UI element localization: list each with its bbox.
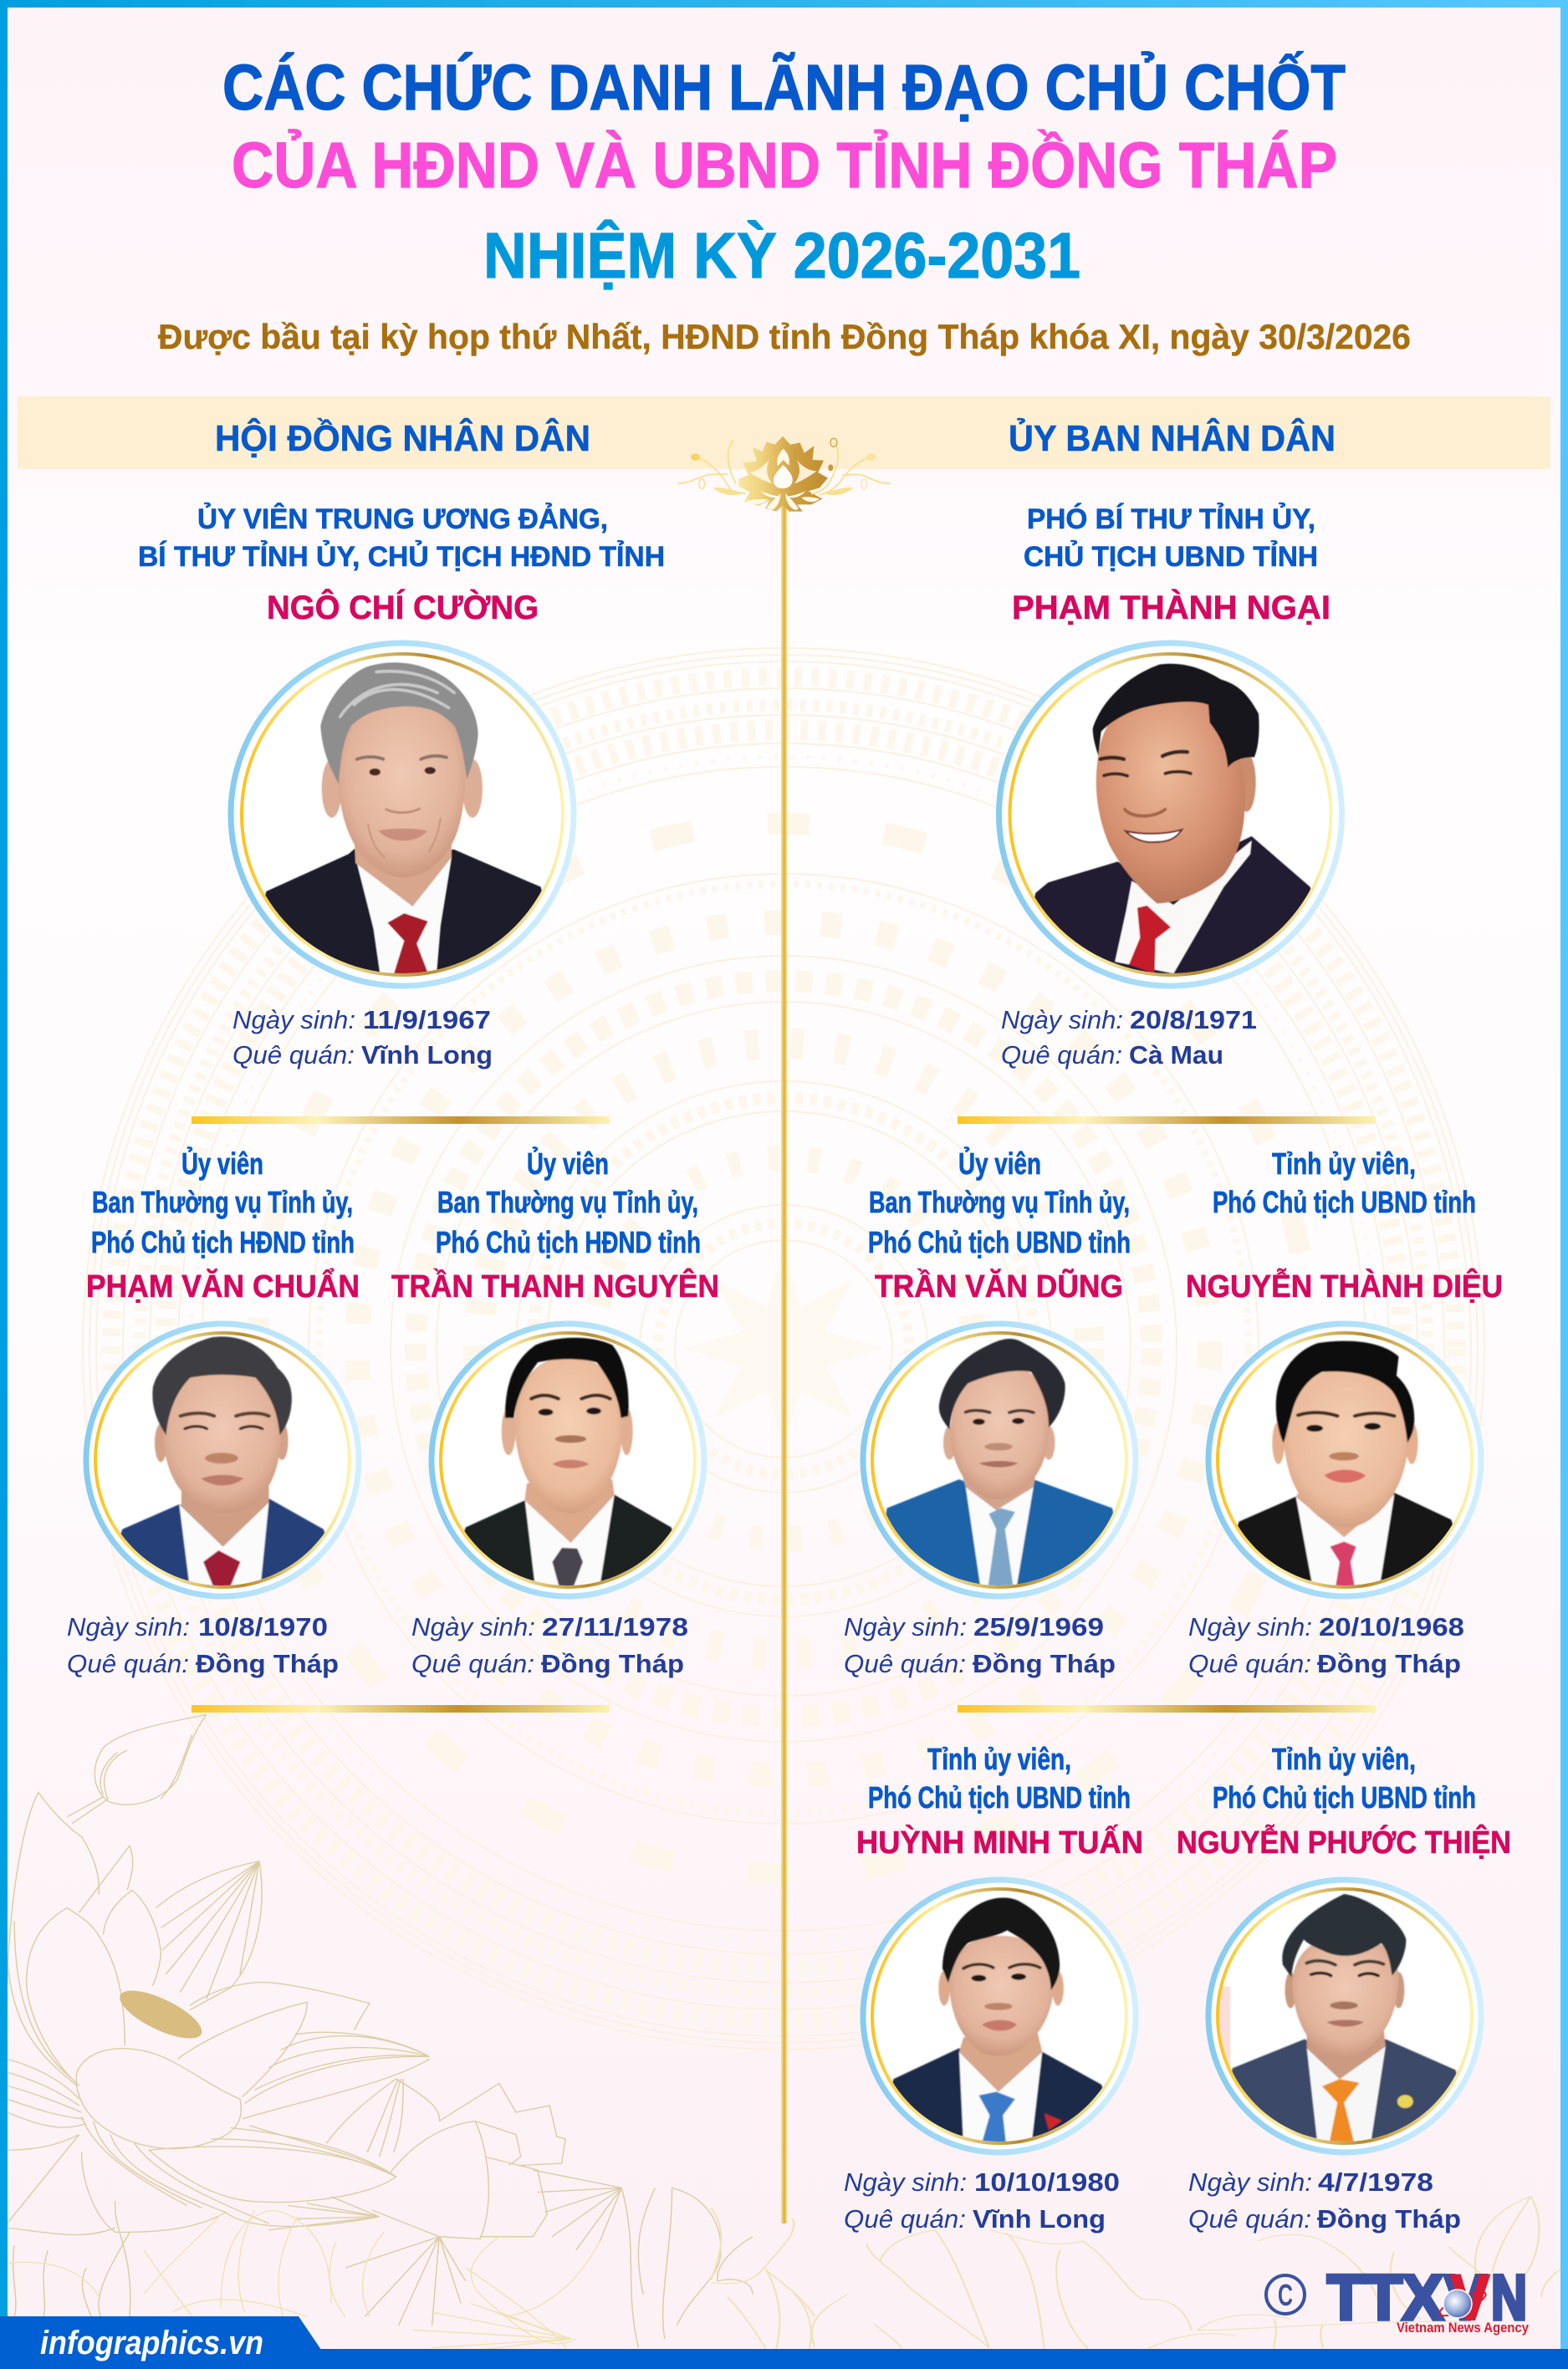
bio: Đồng Tháp	[1317, 1649, 1461, 1678]
role text	[1024, 503, 1318, 573]
name: TRẦN VĂN DŨNG	[875, 1268, 1123, 1304]
panel: Ngô Chí Cường	[138, 503, 665, 1070]
divider bar: right row 3	[958, 1705, 1376, 1713]
bio: Đồng Tháp	[196, 1649, 339, 1678]
role text: Phó Chủ tịch HĐND tỉnh	[91, 1225, 355, 1259]
footer site label: infographics.vn	[40, 2325, 263, 2361]
section header band	[18, 396, 1550, 469]
title line 2: CỦA HĐND VÀ UBND TỈNH ĐỒNG THÁP	[232, 129, 1337, 202]
background: lotus line art bottom left	[8, 1714, 753, 2350]
bio	[844, 2167, 1120, 2234]
role text	[91, 1146, 355, 1259]
role text: ỦY VIÊN TRUNG ƯƠNG ĐẢNG,	[197, 503, 608, 535]
bio: Đồng Tháp	[973, 1649, 1116, 1678]
role text: CHỦ TỊCH UBND TỈNH	[1024, 541, 1318, 573]
name: HUỲNH MINH TUẤN	[856, 1824, 1143, 1861]
role text: Phó Chủ tịch UBND tỉnh	[1213, 1185, 1476, 1219]
name: PHẠM THÀNH NGẠI	[1012, 589, 1331, 626]
title line 3: NHIỆM KỲ 2026-2031	[483, 219, 1080, 292]
bio: Quê quán:	[1001, 1040, 1122, 1070]
portrait photo	[86, 1324, 359, 1602]
bio: Cà Mau	[1129, 1040, 1223, 1070]
bio: Quê quán:	[844, 2204, 966, 2234]
title line 1: CÁC CHỨC DANH LÃNH ĐẠO CHỦ CHỐT	[222, 51, 1346, 124]
role text: Ủy viên	[181, 1146, 263, 1181]
bio: Ngày sinh:	[232, 1005, 355, 1034]
frame: top bar	[0, 0, 1568, 8]
name: TRẦN THANH NGUYÊN	[391, 1268, 719, 1304]
wordmark: TTX	[1327, 2263, 1443, 2333]
bio: Ngày sinh:	[1188, 2167, 1312, 2197]
title block	[158, 51, 1411, 356]
role text: Phó Chủ tịch HĐND tỉnh	[436, 1225, 701, 1259]
wordmark: Vietnam News Agency	[1397, 2320, 1529, 2336]
portrait photo	[231, 643, 574, 1015]
panel: Trần Văn Dũng	[844, 1146, 1136, 1678]
heading: right column: ỦY BAN NHÂN DÂN	[1009, 416, 1336, 459]
role text: Ban Thường vụ Tỉnh ủy,	[92, 1185, 353, 1219]
bio: Ngày sinh:	[844, 2167, 967, 2197]
role text	[1213, 1146, 1476, 1219]
wordmark: V	[1444, 2263, 1486, 2333]
bio: Đồng Tháp	[541, 1649, 684, 1678]
bio: Ngày sinh:	[1001, 1005, 1123, 1034]
bio: Ngày sinh:	[67, 1612, 190, 1641]
panel: Nguyễn Thành Diệu	[1186, 1146, 1503, 1678]
bio	[1188, 2167, 1461, 2234]
role text: Tỉnh ủy viên,	[1272, 1742, 1416, 1776]
role text: Phó Chủ tịch UBND tỉnh	[868, 1225, 1131, 1259]
logo: TTXVN with copyright	[1266, 2263, 1529, 2336]
bio: 4/7/1978	[1318, 2167, 1433, 2197]
bio: Vĩnh Long	[361, 1040, 493, 1070]
name: NGUYỄN PHƯỚC THIỆN	[1177, 1824, 1511, 1861]
subtitle: Được bầu tại kỳ họp thứ Nhất, HĐND tỉnh Đồng Tháp khóa XI, ngày 30/3/2026	[158, 317, 1411, 356]
role text: Ủy viên	[527, 1146, 609, 1181]
bio	[1001, 1005, 1257, 1070]
frame: left border	[0, 0, 8, 2369]
copyright mark	[1266, 2275, 1305, 2314]
heading: left column: HỘI ĐỒNG NHÂN DÂN	[215, 416, 590, 459]
name: NGUYỄN THÀNH DIỆU	[1186, 1268, 1503, 1304]
bio: Quê quán:	[67, 1649, 189, 1678]
bio: Quê quán:	[1188, 1649, 1311, 1678]
role text	[138, 503, 665, 573]
bio	[411, 1612, 688, 1678]
bio: Quê quán:	[411, 1649, 534, 1678]
bio: Quê quán:	[1188, 2204, 1311, 2234]
wordmark: N	[1491, 2263, 1527, 2333]
name: NGÔ CHÍ CƯỜNG	[267, 588, 539, 626]
divider bar: left row 3	[192, 1705, 610, 1713]
bio: 20/8/1971	[1130, 1005, 1257, 1034]
role text: Tỉnh ủy viên,	[1272, 1146, 1416, 1181]
panel: Nguyễn Phước Thiện	[1177, 1742, 1511, 2234]
role text: BÍ THƯ TỈNH ỦY, CHỦ TỊCH HĐND TỈNH	[138, 541, 665, 573]
bio: Quê quán:	[232, 1040, 355, 1070]
role text: Ủy viên	[958, 1146, 1041, 1181]
bio: Ngày sinh:	[411, 1612, 535, 1641]
bio	[67, 1612, 339, 1678]
bio: 10/8/1970	[198, 1612, 328, 1641]
bio: Đồng Tháp	[1317, 2204, 1461, 2234]
portrait photo	[432, 1324, 704, 1602]
panel: Huỳnh Minh Tuấn	[844, 1742, 1143, 2234]
wordmark: V	[1451, 2263, 1489, 2333]
portrait photo	[863, 1880, 1136, 2161]
bio: 25/9/1969	[973, 1612, 1104, 1641]
panel: Phạm Văn Chuẩn	[67, 1146, 360, 1678]
background: lotus line art bottom right	[711, 2197, 1568, 2348]
role text	[1213, 1742, 1476, 1815]
center divider stem	[781, 502, 787, 2223]
role text: PHÓ BÍ THƯ TỈNH ỦY,	[1027, 503, 1315, 535]
footer band	[0, 2349, 1568, 2369]
bio: Ngày sinh:	[1188, 1612, 1312, 1641]
panel: Phạm Thành Ngại	[999, 503, 1341, 1070]
portrait photo	[999, 643, 1341, 1015]
portrait photo	[863, 1324, 1136, 1602]
divider bar: right row 2	[958, 1116, 1376, 1124]
role text	[868, 1146, 1131, 1259]
bio: 27/11/1978	[542, 1612, 688, 1641]
role text	[868, 1742, 1131, 1815]
background: bronze drum pattern	[83, 648, 1484, 2050]
role text: Ban Thường vụ Tỉnh ủy,	[437, 1185, 698, 1219]
role text: Tỉnh ủy viên,	[927, 1742, 1071, 1776]
copyright mark: C	[1278, 2278, 1293, 2312]
panel: Trần Thanh Nguyên	[391, 1146, 719, 1678]
bio	[844, 1612, 1116, 1678]
divider bar: left row 2	[192, 1116, 610, 1124]
bio	[232, 1005, 493, 1070]
role text: Phó Chủ tịch UBND tỉnh	[868, 1780, 1131, 1815]
frame: right border	[1560, 0, 1568, 2369]
portrait photo	[1208, 1324, 1481, 1602]
icon: golden lotus	[678, 437, 891, 512]
footer tab	[0, 2316, 321, 2369]
bio: Quê quán:	[844, 1649, 966, 1678]
wordmark	[1327, 2263, 1529, 2336]
role text: Ban Thường vụ Tỉnh ủy,	[869, 1185, 1130, 1219]
bio: Vĩnh Long	[973, 2204, 1106, 2234]
bio: 11/9/1967	[363, 1005, 491, 1034]
bio: 20/10/1968	[1319, 1612, 1464, 1641]
name: PHẠM VĂN CHUẨN	[86, 1267, 360, 1304]
bio	[1188, 1612, 1464, 1678]
role text: Phó Chủ tịch UBND tỉnh	[1213, 1780, 1476, 1815]
role text	[436, 1146, 701, 1259]
bio: 10/10/1980	[974, 2167, 1120, 2197]
portrait photo	[1208, 1880, 1481, 2161]
bio: Ngày sinh:	[844, 1612, 967, 1641]
